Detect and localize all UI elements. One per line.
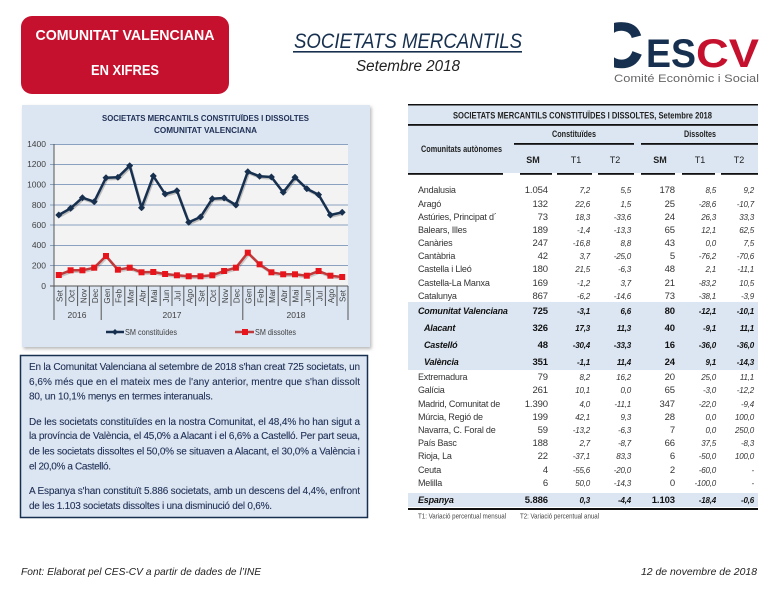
row: Balears: 62,5 [739,226,755,235]
row: Balears: 12,1 [701,226,716,235]
row: País Basc: -8,7 [618,439,632,448]
row: Catalunya: 867 [532,291,548,302]
row: Rioja: 6 [670,451,675,462]
row: Andalusia: 1.054 [525,185,548,196]
row: Andalusia: Andalusia [418,185,456,195]
row: Espanya: -18,4 [699,496,717,505]
month labels: Gen [103,288,112,304]
table footnote [418,514,599,520]
paragraph 2: la província de València, el 45,0% a Alacant i el 6,6% a Castelló. Per part seua, [29,431,360,442]
badge: Comunitat Valenciana en xifres: COMUNITAT VALENCIANA [36,27,215,44]
month labels: Jul [315,291,324,301]
month labels: Jun [162,290,171,302]
table: societats per comunitat autonoma [408,104,758,520]
month labels: Dec [91,289,100,303]
row: Espanya: 0,3 [579,496,591,505]
row: Ceuta: 2 [670,465,675,476]
row: Melilla: -14,3 [614,479,632,488]
y axis labels [27,139,46,291]
row: Castella-La Manxa: 169 [532,278,548,289]
row: Ceuta: -60,0 [699,466,717,475]
paragraph 3 [29,486,360,512]
row: Extremadura: 16,2 [616,373,632,382]
row: Ceuta [418,465,755,476]
row: Extremadura: Extremadura [418,372,468,382]
row: Navarra: 59 [538,425,548,436]
row: Aragó: 1,5 [620,200,632,209]
row: Melilla: 6 [543,478,548,489]
row: Castelló: Castelló [424,340,458,350]
row: València: 24 [665,357,676,368]
row: Melilla: -100,0 [695,479,717,488]
row: Ceuta: Ceuta [418,465,441,475]
row: Castella i Lleó: Castella i Lleó [418,264,472,274]
row: Galícia: -12,2 [737,386,755,395]
month labels: Mai [292,289,301,302]
month labels: Jun [304,290,312,302]
row: Castella i Lleó: 2,1 [704,265,716,274]
row: Catalunya: 73 [665,291,675,302]
month labels: Nov [79,289,88,303]
row: Canàries [418,238,755,249]
row: Castella i Lleó: 21,5 [574,265,591,274]
row: País Basc: -8,3 [741,439,755,448]
month labels: Mar [126,289,136,303]
row: València: València [424,357,459,367]
month labels: Mai [150,289,159,302]
table footnote: T2: Variació percentual anual [520,514,599,520]
month labels: Abr [138,289,147,302]
paragraph 1: 6,6% més que en el mateix mes de l'any anterior, mentre que s'han dissolt [29,377,360,388]
logo: CES CV: Comité Econòmic i Social [614,73,759,85]
row: Catalunya: -6,2 [577,292,591,301]
row: Melilla: 50,0 [575,479,591,488]
month labels: Feb [256,289,265,303]
month labels: Oct [68,289,76,302]
row: Astúries: 33,3 [739,213,755,222]
date: 12 de novembre de 2018 [641,566,757,578]
panel: line chart [22,105,370,347]
row: Andalusia: 7,2 [579,186,591,195]
row: Alacant: 17,3 [575,324,591,333]
paragraph 1: En la Comunitat Valenciana al setembre de 2018 s'han creat 725 societats, un [29,362,360,373]
highlight band: Espanya [408,493,758,507]
row: Cantàbria: 5 [670,251,675,262]
subtitle: Setembre 2018 [356,58,460,75]
row: Castella i Lleó [418,264,754,275]
row: Extremadura: 25,0 [700,373,717,382]
row: Canàries: 0,0 [705,239,717,248]
y axis labels: 400 [32,240,46,250]
row: Astúries: 18,3 [575,213,591,222]
month labels: Mar [268,289,277,303]
row: Rioja: 100,0 [735,452,755,461]
year labels: 2018 [287,310,306,320]
y axis labels: 1400 [27,139,46,149]
legend: SM constituïdes [125,327,177,337]
month labels: Gen [244,288,254,304]
row: Madrid [418,399,755,410]
paragraph 2: De les societats constituïdes en la nostra Comunitat, el 48,4% ho han sigut a [29,417,360,428]
row: Madrid: 4,0 [579,400,591,409]
row: Comunitat Valenciana: 725 [532,306,549,317]
table header: T1 [571,155,581,165]
highlight band: Comunitat Valenciana [408,302,758,370]
row: Aragó: -10,7 [737,200,755,209]
month labels: Set [339,289,348,302]
row: Comunitat Valenciana: -10,1 [737,307,755,316]
row: Galícia [418,385,755,396]
row: Andalusia [418,185,755,196]
logo: CES CV: C [597,11,642,81]
row: Madrid: -11,1 [614,400,631,409]
row: Extremadura: 11,1 [740,373,754,382]
legend: SM dissoltes [255,327,296,337]
y axis labels: 1200 [27,159,46,169]
row: Navarra: 7 [670,425,675,436]
row: València: 11,4 [617,358,632,367]
table header [408,104,758,175]
row: Andalusia: 178 [659,185,675,196]
row: Ceuta: - [752,466,755,475]
row: Cantàbria: Cantàbria [418,251,455,261]
row: Aragó: Aragó [418,199,441,209]
y axis labels: 800 [32,200,46,210]
row: Astúries: -33,6 [614,213,632,222]
paragraph 2 [29,417,360,472]
row: Aragó: 25 [665,199,675,210]
row: Castelló: -33,3 [614,341,632,350]
row: Canàries: 8,8 [620,239,632,248]
table header: T2 [734,155,744,165]
badge: Comunitat Valenciana en xifres [21,16,229,94]
row: Canàries: 247 [532,238,548,249]
source note: Font: Elaborat pel CES-CV a partir de dades de l’INE [21,566,262,578]
row: Castelló [424,340,755,351]
row: Navarra: 250,0 [734,426,755,435]
row: País Basc: 2,7 [578,439,591,448]
row: Aragó: -28,6 [699,200,717,209]
row: Rioja [418,451,755,462]
month labels: Abr [280,289,289,302]
row: València: 351 [532,357,549,368]
row: Catalunya: Catalunya [418,291,457,301]
series: SM constituïdes [59,166,343,224]
row: Espanya: -4,4 [618,496,632,505]
row: Espanya: 5.886 [525,495,548,506]
row: Múrcia: 199 [532,412,548,423]
table header: T1 [695,155,705,165]
row: Castella-La Manxa: 3,7 [620,279,632,288]
year labels: 2016 [68,310,87,320]
row: Melilla: Melilla [418,478,442,488]
row: Rioja: Rioja, La [418,451,452,461]
row: Múrcia: 100,0 [735,413,755,422]
row: Andalusia: 9,2 [743,186,755,195]
row: Catalunya: -38,1 [699,292,716,301]
row: Castella-La Manxa: -83,2 [699,279,717,288]
month labels: Ago [186,288,194,303]
row: Alacant [423,323,755,334]
row: Alacant: Alacant [423,323,456,333]
row: Andalusia: 5,5 [620,186,632,195]
row: Castella i Lleó: -11,1 [737,265,754,274]
row: Extremadura: 20 [665,372,675,383]
row: Rioja: 83,3 [616,452,632,461]
row: Madrid: -9,4 [741,400,755,409]
paragraph 2: el 20,0% a Castelló. [29,462,111,472]
month labels: Ago [327,288,336,303]
chart title [102,113,309,135]
paragraph 2: de les societats dissoltes el 50,0% se situaven a Alacant, el 30,0% a València i [29,446,360,458]
row: Navarra: -6,3 [618,426,632,435]
row: Ceuta: -55,6 [573,466,591,475]
row: Castelló: -36,0 [737,341,755,350]
row: Castelló: 16 [665,340,675,351]
month labels: Set [197,289,206,302]
row: València: -1,1 [577,358,591,367]
month labels: Dec [233,289,242,303]
row: País Basc: 37,5 [701,439,717,448]
row: Comunitat Valenciana: 6,6 [620,307,632,316]
row: Castella-La Manxa: Castella-La Manxa [418,278,490,288]
y axis labels: 0 [41,281,46,291]
row: Múrcia: 0,0 [705,413,717,422]
table header: SOCIETATS MERCANTILS CONSTITUÏDES I DISSOLTES, Setembre 2018 [453,110,712,120]
row: Rioja: -50,0 [699,452,717,461]
logo: CES CV [614,22,759,82]
month labels: Jul [174,291,183,301]
row: Navarra [418,425,755,436]
row: Galícia: Galícia [418,385,445,395]
month labels [56,288,348,304]
row: Balears: -13,3 [614,226,632,235]
row: València: -14,3 [737,358,755,367]
row: Cantàbria: 42 [538,251,548,262]
row: Melilla: - [752,479,755,488]
row: Espanya [418,495,755,506]
title: SOCIETATS MERCANTILS [294,30,522,53]
row: Madrid: -22,0 [699,400,717,409]
row: País Basc [418,438,755,449]
row: València: 9,1 [705,358,717,367]
table header: SM [526,155,540,165]
paragraph 1: 80, un 10,1% menys en termes interanuals. [29,392,213,402]
row: Balears [418,225,755,236]
row: Catalunya [418,291,755,302]
row: Alacant: 326 [532,323,548,334]
row: Castelló: -36,0 [699,341,717,350]
row: Extremadura [418,372,754,383]
row: Alacant: 11,3 [617,324,632,333]
table footnote: T1: Variació percentual mensual [418,514,506,520]
row: Aragó: 132 [532,199,548,210]
row: Castella i Lleó: -6,3 [618,265,632,274]
plot area [54,144,348,286]
row: Castella-La Manxa: 10,5 [739,279,755,288]
row: Castella i Lleó: 48 [665,264,675,275]
row: Canàries: 7,5 [743,239,755,248]
month labels: Oct [209,289,218,302]
year labels: 2017 [163,310,182,320]
logo: CES CV: CV [696,32,759,76]
row: Rioja: 22 [538,451,548,462]
row: Aragó [418,199,755,210]
row: Balears: -1,4 [577,226,591,235]
panel: commentary text [20,356,368,518]
row: Aragó: 22,6 [574,200,591,209]
y axis labels: 1000 [27,180,46,190]
row: Espanya: Espanya [418,495,454,505]
row: Andalusia: 8,5 [705,186,717,195]
year labels [68,310,306,320]
row: Canàries: -16,8 [573,239,591,248]
paragraph 3: de les 1.103 societats dissoltes i una disminució del 0,6%. [29,501,272,512]
row: Navarra: -13,2 [573,426,591,435]
chart title: COMUNITAT VALENCIANA [154,125,257,135]
month labels: Feb [115,289,124,303]
row: Astúries: 73 [538,212,548,223]
row: Galícia: 65 [665,385,675,396]
row: Madrid: Madrid, Comunitat de [418,399,500,409]
row: Cantàbria [418,251,755,262]
row: Espanya: 1.103 [652,495,675,506]
table header: T2 [610,155,620,165]
legend [106,327,296,337]
row: País Basc: 188 [532,438,548,449]
row: Castelló: -30,4 [573,341,591,350]
row: Melilla [418,478,755,489]
row: Navarra: Navarra, C. Foral de [418,425,496,435]
row: Astúries: 24 [665,212,675,223]
row: Comunitat Valenciana [418,306,755,317]
row: Catalunya: -3,9 [741,292,755,301]
badge: Comunitat Valenciana en xifres: EN XIFRES [91,62,159,79]
row: Comunitat Valenciana: 80 [665,306,675,317]
row: Castella-La Manxa [418,278,755,289]
row: Melilla: 0 [670,478,675,489]
row: Múrcia: 42,1 [575,413,590,422]
series: SM dissoltes [59,253,343,278]
month labels: Nov [221,289,230,303]
row: Astúries: Astúries, Principat d´ [418,212,497,222]
row: Alacant: -9,1 [703,324,717,333]
month labels: Set [56,289,65,302]
row: Extremadura: 79 [538,372,548,383]
logo: CES CV: ES [646,32,696,76]
row: Cantàbria: 3,7 [579,252,591,261]
paragraph 1 [29,362,360,402]
row: Galícia: 10,1 [575,386,590,395]
row: Astúries [418,212,755,223]
row: Madrid: 1.390 [525,399,548,410]
row: Navarra: 0,0 [705,426,717,435]
table header: Dissoltes [684,129,716,139]
row: Espanya: -0,6 [741,496,755,505]
row: Castelló: 48 [538,340,548,351]
row: Castella-La Manxa: -1,2 [577,279,591,288]
row: Rioja: -37,1 [573,452,590,461]
y axis labels: 600 [32,220,46,230]
row: Canàries: 43 [665,238,675,249]
row: Catalunya: -14,6 [614,292,632,301]
row: Múrcia [418,412,755,423]
row: Galícia: 261 [532,385,548,396]
row: Galícia: -3,0 [703,386,717,395]
table header: Comunitats autònomes [421,144,502,154]
row: Astúries: 26,3 [700,213,717,222]
chart title: SOCIETATS MERCANTILS CONSTITUÏDES I DISSOLTES [102,113,309,123]
row: Madrid: 347 [659,399,675,410]
row: Balears: 189 [532,225,548,236]
row: Comunitat Valenciana: Comunitat Valenciana [418,306,508,316]
row: Comunitat Valenciana: -12,1 [699,307,717,316]
table header: Constituïdes [552,129,596,139]
row: Ceuta: 4 [543,465,548,476]
row: Alacant: 40 [665,323,675,334]
row: Múrcia: 9,3 [620,413,632,422]
row: Castella-La Manxa: 21 [665,278,675,289]
row: Canàries: Canàries [418,238,453,248]
paragraph 3: A Espanya s'han constituït 5.886 societats, amb un descens del 4,4%, enfront [29,486,360,497]
row: Ceuta: -20,0 [614,466,632,475]
row: Cantàbria: -25,0 [614,252,632,261]
row: Alacant: 11,1 [740,324,755,333]
row: País Basc: 66 [665,438,675,449]
row: Extremadura: 8,2 [579,373,591,382]
row: Galícia: 0,0 [620,386,632,395]
row: Cantàbria: -70,6 [737,252,755,261]
row: Castella i Lleó: 180 [532,264,548,275]
row: Cantàbria: -76,2 [699,252,717,261]
y axis labels: 200 [32,260,46,270]
table header: SM [653,155,667,165]
row: País Basc: País Basc [418,438,457,448]
row: València [424,357,755,368]
row: Balears: Balears, Illes [418,225,467,235]
row: Balears: 65 [665,225,675,236]
row: Múrcia: Múrcia, Regió de [418,412,483,422]
row: Comunitat Valenciana: -3,1 [577,307,591,316]
row: Múrcia: 28 [665,412,675,423]
